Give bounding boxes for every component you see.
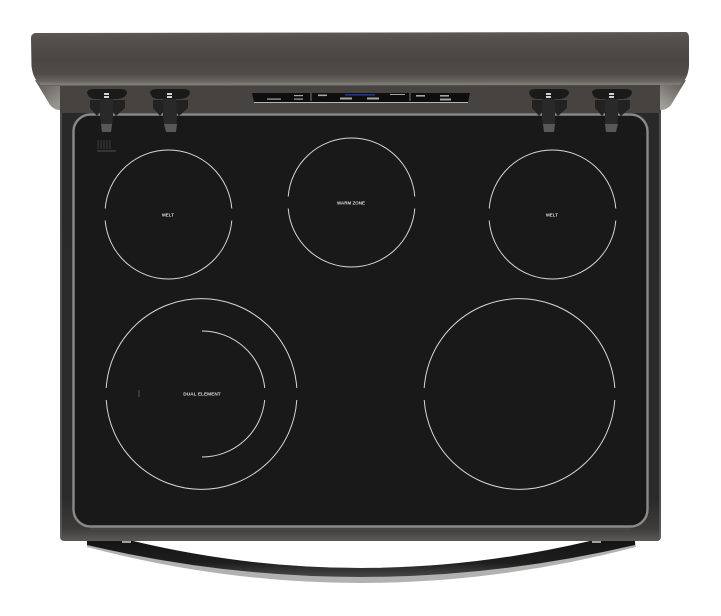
burner: dual element: DUAL ELEMENT [183, 392, 221, 398]
hood / backguard [31, 32, 689, 110]
glass cooktop with chrome edge [74, 114, 648, 529]
knob 1 [87, 89, 127, 132]
burner: warm zone [288, 138, 415, 267]
left wedge [35, 80, 60, 110]
rear control panel [60, 84, 661, 113]
burner: large right [424, 299, 615, 489]
burner: melt left [105, 150, 232, 279]
logo mark on glass [97, 140, 116, 151]
burner: melt right [489, 150, 616, 279]
burner: dual element [106, 299, 297, 489]
burner: melt right: MELT [546, 212, 558, 218]
knob 3 [529, 89, 569, 132]
burner: melt left: MELT [162, 212, 174, 218]
burner: warm zone: WARM ZONE [337, 200, 365, 206]
right wedge [660, 80, 686, 110]
cooktop body [60, 105, 661, 541]
knob 4 [592, 89, 632, 132]
oven door handle [87, 541, 636, 583]
knob 2 [150, 89, 190, 132]
control display [252, 93, 470, 102]
display button marks [267, 94, 451, 100]
